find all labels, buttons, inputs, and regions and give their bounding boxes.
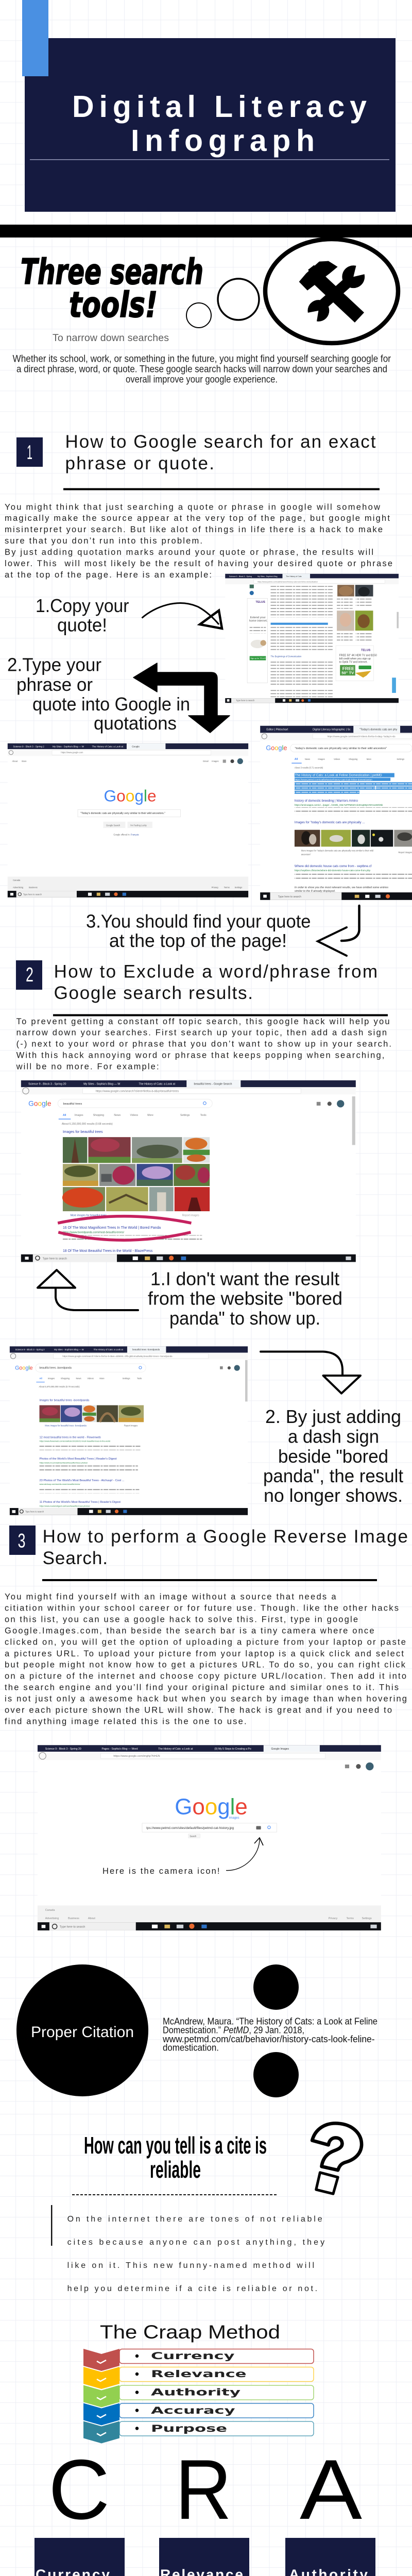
citation text: Domestication.” PetMD, 29 Jan. 2018, bbox=[163, 2025, 304, 2035]
screenshot: google images: images bbox=[229, 1816, 239, 1820]
screenshot: beautiful trees results: https://www.boredpanda.com/most-beautiful-trees/ bbox=[63, 1231, 125, 1234]
section 3 text bbox=[5, 1592, 407, 1726]
section 1 text bbox=[5, 502, 392, 580]
column: authority bbox=[285, 2442, 375, 2576]
section 2 text: will be no more. For example: bbox=[16, 1062, 159, 1072]
caption: bored panda result: from the website "bored bbox=[148, 1288, 342, 1309]
screenshot: google results: In order to show you the most relevant results, we have omitted some entries bbox=[295, 886, 388, 889]
screenshot: petmd article: The Beginnings of Domestication bbox=[271, 655, 301, 658]
screenshot: google images: Search bbox=[190, 1835, 196, 1837]
screenshot: google results: https://aminoapps.com/c/.../page/.../VeWk_G8c7uPPMDZC1k3mqE8pVWVvwWrkNk bbox=[295, 804, 383, 806]
citation text: domestication. bbox=[163, 2043, 219, 2053]
row: purpose: Purpose bbox=[151, 2423, 227, 2434]
screenshot: google results bbox=[260, 726, 412, 900]
screenshot: petmd article: Science 9 - Block 3 - Spring bbox=[229, 575, 252, 578]
title: Infograph bbox=[131, 124, 315, 158]
screenshot: results without bored panda: Images bbox=[48, 1377, 55, 1380]
screenshot: google images: Privacy bbox=[329, 1917, 338, 1920]
screenshot: petmd article bbox=[225, 574, 399, 703]
screenshot: beautiful trees results: Science 9 - Block 3 - Spring 20 bbox=[28, 1083, 66, 1086]
screenshot: google home bbox=[8, 743, 248, 897]
screenshot: results without bored panda: News bbox=[76, 1377, 81, 1380]
arrow: to the result bbox=[318, 906, 359, 956]
screenshot: google results: Images for "today's domestic cats are physically ... bbox=[295, 821, 365, 824]
row: relevance bbox=[83, 2367, 314, 2389]
screenshot: google images: Science 9 - Block 3 - Spring 20 bbox=[45, 1748, 81, 1751]
screenshot: petmd article: My Sites - Sophia's Blog bbox=[258, 575, 278, 578]
screenshot: beautiful trees results: Tools bbox=[200, 1114, 207, 1117]
section 1 heading: 1 bbox=[27, 442, 32, 464]
screenshot: results without bored panda: Shopping bbox=[61, 1377, 70, 1380]
screenshot: results without bored panda bbox=[10, 1346, 248, 1515]
section 3 text: on a picture of the internet and choose copy picture URL/location. Then add it into bbox=[5, 1672, 406, 1681]
screenshot: petmd article: https://www.petmd.com/cat/behavior/history-cats-look-feline-domestication bbox=[258, 581, 318, 583]
screenshot: google images: Pages - Sophia's Blog — Word bbox=[101, 1748, 138, 1751]
section 1 text: lower. This will most likely be the result of having your desired quote or phrase bbox=[5, 559, 392, 568]
screenshot: google images: Canada bbox=[45, 1909, 55, 1912]
screenshot: google images bbox=[38, 1745, 381, 1930]
screenshot: results without bored panda: Photos of the World's Most Beautiful Trees | Reader's Digest bbox=[40, 1458, 117, 1461]
screenshot: google results: More bbox=[367, 758, 372, 760]
screenshot: results without bored panda: Videos bbox=[87, 1377, 94, 1380]
row: purpose bbox=[83, 2421, 314, 2443]
text: reliability intro bbox=[51, 2205, 324, 2293]
screenshot: google home: Business bbox=[29, 886, 38, 889]
step: copy your quote bbox=[36, 595, 129, 636]
screenshot: petmd article: TELUS bbox=[361, 649, 371, 652]
caption: dash sign: 2. By just adding bbox=[265, 1406, 401, 1427]
section 3 heading bbox=[9, 1526, 408, 1581]
screenshot: beautiful trees results: All bbox=[63, 1114, 66, 1117]
screenshot: google home: Science 9 - Block 3 - Spring 2 bbox=[13, 745, 44, 748]
screenshot: google images: Google Images bbox=[271, 1748, 289, 1751]
screenshot: google images: The History of Cats: a Look at bbox=[158, 1748, 193, 1751]
screenshot: google home: Google bbox=[104, 787, 157, 805]
screenshot: results without bored panda: 12 most beautiful trees in the world - Flowerweb bbox=[40, 1436, 101, 1439]
section 1 text: By just adding quotation marks around your quote or phrase, the results will bbox=[5, 548, 373, 557]
screenshot: google results: The History of Cats: a Look at Feline Domestication | petMD bbox=[295, 774, 382, 777]
screenshot: google results: About 3 results (0.71 seconds) bbox=[295, 766, 323, 769]
caption: camera icon: Here is the camera icon! bbox=[102, 1867, 219, 1876]
arrow: thick two way bbox=[133, 663, 230, 733]
text: reliability intro: cites because anyone can post anything, they bbox=[67, 2238, 324, 2247]
screenshot: petmd article: Type here to search bbox=[236, 699, 254, 702]
screenshot: google images: About bbox=[88, 1917, 95, 1920]
text: reliability intro: help you determine if a cite is reliable or not. bbox=[67, 2284, 317, 2293]
column: authority: A bbox=[300, 2442, 362, 2537]
screenshot: google results: history of domestic breeding | Warriors Amino bbox=[295, 799, 358, 803]
screenshot: beautiful trees results: Type here to search bbox=[43, 1257, 67, 1260]
screenshot: results without bored panda: More images for beautiful trees -boredpanda bbox=[45, 1424, 87, 1427]
arrow: curved to article bbox=[142, 603, 222, 629]
screenshot: google images: Google bbox=[175, 1794, 248, 1819]
intro text: overall improve your google experience. bbox=[126, 374, 278, 385]
column: currency bbox=[11, 2442, 146, 2576]
step: find your quote: 3.You should find your quote bbox=[86, 911, 311, 931]
section 2 text: (-) next to your word or phrase that you don’t want to show up in your search. bbox=[16, 1040, 391, 1049]
section 3 text: the search engine and you’ll find your original picture and similar ones to it. This bbox=[5, 1683, 399, 1692]
screenshot: results without bored panda: https://www.flowerweb.com/en/article/191190/12-most-beautiful-trees-in-the-world bbox=[40, 1440, 110, 1442]
screenshot: beautiful trees results bbox=[21, 1080, 356, 1262]
screenshot: google results: Type here to search bbox=[278, 895, 301, 899]
screenshot: google home: Gmail bbox=[203, 760, 209, 762]
screenshot: petmd article: FREE bbox=[342, 666, 354, 671]
arrow: down to caption bbox=[261, 1352, 360, 1394]
step: type into google bbox=[7, 654, 190, 734]
screenshot: results without bored panda: Science 9 - Block 3 - Spring 2 bbox=[15, 1348, 45, 1351]
screenshot: google home: Settings bbox=[235, 886, 242, 889]
screenshot: google results: Images bbox=[318, 758, 325, 760]
section 3 text: on this list, you can use a google hack to solve this. First, type in google bbox=[5, 1615, 358, 1624]
screenshot: google home: I'm Feeling Lucky bbox=[130, 824, 147, 827]
section 3 text: citiation within your school career or for future use. Though. like the other hacks bbox=[5, 1603, 399, 1613]
screenshot: beautiful trees results: https://www.google.com/search?client=firefox-b-d&q=beautiful+trees bbox=[96, 1090, 179, 1093]
screenshot: google results: Where did domestic house cats come from - xeptbne.cf bbox=[295, 865, 372, 868]
heading: the craap method: The Craap Method bbox=[100, 2321, 280, 2343]
row: accuracy: Accuracy bbox=[151, 2405, 236, 2416]
screenshot: google results: "Today's domestic cats are phy bbox=[359, 728, 398, 731]
screenshot: google home: Privacy bbox=[212, 886, 219, 889]
section 2 text: narrow down your searches. First search up your topic, then add a dash sign bbox=[16, 1028, 387, 1038]
screenshot: results without bored panda: https://www.rd.com/advice/travel/beautiful-trees-photos/ bbox=[40, 1462, 88, 1464]
section 3 text: over each picture shown the URL will show. The hack is great and if you need to bbox=[5, 1705, 392, 1715]
screenshot: results without bored panda: 11 Photos of the World's Most Beautiful Trees | Reader's Digest bbox=[40, 1501, 121, 1504]
panel: title banner bbox=[22, 0, 396, 212]
screenshot: google images: (9) My 5 Steps to Creating a Po bbox=[214, 1748, 251, 1751]
screenshot: google images: Terms bbox=[346, 1917, 354, 1920]
text: reliability intro: like on it. This new funny-named method will bbox=[67, 2261, 314, 2270]
caption: dash sign bbox=[263, 1406, 403, 1506]
screenshot: beautiful trees results: Report images bbox=[182, 1214, 199, 1217]
screenshot: beautiful trees results: More bbox=[147, 1114, 153, 1117]
section 1 text: You might think that just searching a quote or phrase in google will somehow bbox=[5, 502, 380, 512]
column: relevance bbox=[151, 2442, 263, 2576]
screenshot: google images: tps://www.petmd.com/sites/default/files/petmd-cat-history.jpg bbox=[146, 1826, 234, 1830]
screenshot: petmd article: The History of Cats bbox=[286, 575, 302, 578]
screenshot: beautiful trees results: beautiful trees - Google Search bbox=[194, 1083, 232, 1086]
list: craap chevrons bbox=[83, 2349, 314, 2443]
arrow: to camera icon bbox=[226, 1838, 263, 1871]
screenshot: beautiful trees results: More images for beautiful trees bbox=[71, 1214, 107, 1217]
screenshot: results without bored panda: Settings bbox=[123, 1377, 130, 1380]
screenshot: results without bored panda: More bbox=[99, 1377, 105, 1380]
screenshot: google results: Settings bbox=[397, 758, 404, 760]
screenshot: results without bored panda: Report images bbox=[124, 1424, 138, 1427]
screenshot: google images: Settings bbox=[362, 1917, 372, 1920]
screenshot: results without bored panda: Tools bbox=[137, 1377, 142, 1380]
screenshot: petmd article: to Optik TV and internet. bbox=[339, 661, 368, 664]
icon: thought bubbles with tools bbox=[186, 239, 398, 343]
heading: how can you tell: How can you tell is a cite is bbox=[84, 2132, 267, 2159]
screenshot: results without bored panda: https://www.google.com/search?client=firefox-b-d&ei=4d59X6..Ofb-g5DoKudtw8q-beautiful+trees+-boredpanda bbox=[62, 1355, 173, 1358]
screenshot: google results: Report images bbox=[398, 851, 412, 854]
screenshot: google home: Store bbox=[22, 760, 27, 762]
title: Digital Literacy bbox=[72, 90, 367, 124]
screenshot: google results: Videos bbox=[334, 758, 340, 760]
screenshot: google results: ancestors" bbox=[301, 853, 311, 856]
screenshot: petmd article: TELUS bbox=[255, 601, 265, 604]
screenshot: google results: More images for "today's domestic cats are physically very similar to their wild bbox=[301, 850, 373, 852]
screenshot: google home: The History of Cats: a Look at bbox=[92, 745, 124, 748]
section 1 heading bbox=[16, 432, 380, 490]
section 3 text: but people might not know how to get a pictures URL. To do so, you can right click bbox=[5, 1660, 406, 1670]
circle with label bbox=[16, 1964, 148, 2096]
section 2 text: With this hack annoying word or phrase that keeps popping when searching, bbox=[16, 1051, 384, 1060]
screenshot: beautiful trees results: Google bbox=[28, 1099, 52, 1107]
icon: hammer and wrench bbox=[299, 261, 368, 325]
section 1 text: misinterpret your search. But like alot of things in life there is a hack to make bbox=[5, 525, 383, 534]
screenshot: google results: https://xeptbne.cf/stories/where-did-domestic-house-cats-come-from.php bbox=[295, 869, 370, 872]
screenshot: results without bored panda: beautiful trees -boredpanda bbox=[132, 1348, 160, 1351]
heading: three search tools bbox=[21, 252, 203, 326]
screenshot: results without bored panda: All bbox=[40, 1377, 42, 1380]
screenshot: google images: Advertising bbox=[45, 1917, 59, 1920]
icon: question mark bbox=[312, 2123, 362, 2194]
screenshot: petmd article: Sign up for TELUS bbox=[250, 657, 266, 659]
screenshot: google home: Google bbox=[132, 745, 140, 748]
screenshot: beautiful trees results: Shopping bbox=[93, 1114, 104, 1117]
screenshot: beautiful trees results: News bbox=[114, 1114, 121, 1117]
screenshot: beautiful trees results: The History of Cats: a Look at bbox=[139, 1083, 176, 1086]
screenshot: results without bored panda: Type here to search bbox=[25, 1511, 44, 1513]
screenshot: google home: Images bbox=[212, 760, 219, 762]
screenshot: beautiful trees results: Settings bbox=[180, 1114, 190, 1117]
screenshot: beautiful trees results: My Sites - Sophia's Blog — W bbox=[83, 1083, 121, 1086]
section 3 text: a pictures URL. To upload your picture from your laptop is a quick click and select bbox=[5, 1649, 404, 1658]
screenshot: google results: Google bbox=[266, 744, 287, 752]
column: currency: C bbox=[48, 2442, 110, 2537]
screenshot: beautiful trees results: About 6,150,000,000 results (0.68 seconds) bbox=[62, 1123, 113, 1126]
screenshot: google results: Editor | Piktochart bbox=[266, 728, 288, 731]
heading: how can you tell bbox=[84, 2132, 267, 2183]
screenshot: google images: Type here to search bbox=[60, 1925, 85, 1928]
heading: three search tools: tools! bbox=[69, 285, 158, 326]
section 3 heading: How to perform a Google Reverse Image bbox=[43, 1527, 408, 1547]
section 2 heading: Google search results. bbox=[54, 983, 253, 1003]
screenshot: google results: similar to the 8 already displayed. bbox=[295, 890, 335, 893]
intro text bbox=[12, 353, 391, 385]
panel: proper citation bbox=[16, 1964, 377, 2097]
screenshot: beautiful trees results: 16 Of The Most Magnificent Trees In The World | Bored Panda bbox=[63, 1226, 161, 1230]
screenshot: google home: My Sites - Sophia's Blog — W bbox=[53, 745, 84, 748]
row: currency: Currency bbox=[151, 2350, 235, 2362]
section 2 heading: How to Exclude a word/phrase from bbox=[54, 961, 377, 982]
caption: bored panda result bbox=[148, 1268, 342, 1329]
subtitle: To narrow down searches bbox=[53, 332, 169, 344]
caption: dash sign: a dash sign bbox=[288, 1426, 379, 1447]
screenshot: google home: "Today's domestic cats are physically very similar to their wild ancestors." bbox=[80, 812, 165, 815]
screenshot: petmd article: FREE 50" 4K HDR TV and $150 bbox=[339, 654, 377, 657]
screenshot: google results: All bbox=[295, 758, 298, 761]
step: copy your quote: quote! bbox=[57, 614, 107, 636]
step: find your quote bbox=[86, 911, 311, 951]
citation text: www.petmd.com/cat/behavior/history-cats-look-feline- bbox=[162, 2034, 375, 2044]
caption: dash sign: panda", the result bbox=[263, 1465, 403, 1486]
section 1 heading: How to Google search for an exact bbox=[65, 432, 376, 452]
screenshot: google home: Canada bbox=[13, 879, 21, 882]
screenshot: petmd article: home internet. bbox=[249, 620, 268, 623]
screenshot: google home: Advertising bbox=[13, 886, 23, 889]
screenshot: results without bored panda: The History of Cats: a Look at bbox=[94, 1348, 124, 1351]
screenshot: google images: https://www.google.com/imghp?hl=EN bbox=[113, 1755, 160, 1758]
title bbox=[72, 90, 367, 158]
screenshot: google results: News bbox=[305, 758, 310, 760]
section 3 text: clicked on, you will get the option of uploading a picture from your laptop or paste bbox=[5, 1637, 406, 1647]
screenshot: google results: https://www.petmd.com/cat/behavior/history-cats-look-feline-domestication bbox=[295, 778, 372, 781]
section 3 text: Google.Images.com, than beside the search bar is a tiny camera where once bbox=[5, 1626, 374, 1635]
section 2 heading: 2 bbox=[26, 964, 33, 986]
screenshot: google home: About bbox=[12, 760, 18, 762]
citation text: McAndrew, Maura. “The History of Cats: a Look at Feline bbox=[163, 2016, 377, 2027]
caption: dash sign: no longer shows. bbox=[264, 1485, 403, 1506]
step: type into google: quote into Google in bbox=[32, 693, 190, 715]
screenshot: petmd article: Extend your bbox=[250, 616, 266, 619]
screenshot: google home: Google offered in: Français bbox=[113, 833, 139, 836]
screenshot: google results: Digital Literacy Infographic | Sc bbox=[313, 728, 351, 731]
heading: three search tools: Three search bbox=[21, 252, 203, 293]
section 3 text: find anything image related this is the one to use. bbox=[5, 1717, 247, 1726]
section 2 text bbox=[16, 1017, 391, 1072]
screenshot: results without bored panda: beautiful trees -boredpanda bbox=[40, 1367, 72, 1370]
screenshot: results without bored panda: Google bbox=[15, 1365, 33, 1371]
step: copy your quote: 1.Copy your bbox=[36, 595, 129, 616]
section 1 text: magically make the source appear at the very top of the page, but google might bbox=[5, 514, 390, 523]
screenshot: google home: https://www.google.com bbox=[61, 751, 83, 754]
blue accent tab bbox=[22, 0, 48, 76]
section 2 heading bbox=[16, 960, 388, 1016]
screenshot: petmd article: bill credit when you sign up bbox=[339, 657, 371, 660]
step: find your quote: at the top of the page! bbox=[109, 930, 287, 951]
text: reliability intro: On the internet there are tones of not reliable bbox=[67, 2215, 322, 2224]
screenshot: beautiful trees results: beautiful trees bbox=[63, 1103, 82, 1106]
screenshot: google home: Type here to search bbox=[23, 893, 42, 896]
screenshot: beautiful trees results: Images bbox=[75, 1114, 83, 1117]
section 3 heading: 3 bbox=[18, 1530, 26, 1552]
screenshot: petmd article: 50" TV bbox=[341, 671, 354, 675]
screenshot: results without bored panda: About 5,670,000,000 results (0.78 seconds) bbox=[39, 1385, 80, 1388]
screenshot: beautiful trees results: Videos bbox=[130, 1114, 138, 1117]
row: accuracy bbox=[83, 2403, 314, 2426]
screenshot: google results: "today's domestic cats are physically very similar to their wild ancestors" bbox=[295, 747, 387, 750]
step: type into google: 2.Type your bbox=[7, 654, 101, 675]
row: currency bbox=[83, 2349, 314, 2371]
arrow: up from caption to results bbox=[38, 1270, 138, 1310]
row: authority: Authority bbox=[151, 2386, 241, 2398]
screenshot: google results: https://www.google.com/search?client=firefox-b-d&q="today's+do bbox=[328, 735, 396, 738]
circle with label: Proper Citation bbox=[31, 2024, 134, 2041]
step: type into google: quotations bbox=[94, 713, 177, 734]
section 1 text: sure that you don’t run into this problem. bbox=[5, 536, 202, 546]
column: relevance: R bbox=[175, 2442, 232, 2537]
step: type into google: phrase or bbox=[16, 674, 93, 695]
section 1 text: at the top of the page. Here is an example: bbox=[5, 570, 212, 580]
screenshot: google home: Google Search bbox=[106, 824, 120, 827]
screenshot: google results: Shopping bbox=[349, 758, 357, 760]
section 1 heading: phrase or quote. bbox=[65, 453, 214, 473]
section 3 text: You might find yourself with an image without a source that needs a bbox=[5, 1592, 336, 1602]
screenshot: google home: Terms bbox=[224, 886, 230, 889]
screenshot: results without bored panda: https://www.readersdigest.ca/travel/beautiful-trees-photos/ bbox=[40, 1505, 91, 1507]
screenshot: results without bored panda: www.atchuup.com/worlds-most-beautiful-trees/ bbox=[40, 1483, 81, 1485]
caption: dash sign: beside "bored bbox=[278, 1446, 388, 1467]
section 3 text: is not just only a awesome hack but when you search by image than when hovering bbox=[5, 1694, 407, 1704]
screenshot: google images: Business bbox=[68, 1917, 79, 1920]
section 3 heading: Search. bbox=[43, 1548, 108, 1568]
row: relevance: Relevance bbox=[151, 2368, 247, 2380]
section 2 text: To prevent getting a constant off topic search, this google hack will help you bbox=[16, 1017, 390, 1026]
screenshot: beautiful trees results: 18 Of The Most Beautiful Trees in the World - BlazePress bbox=[63, 1249, 153, 1253]
heading: how can you tell: reliable bbox=[150, 2156, 201, 2183]
citation text bbox=[162, 2016, 377, 2053]
screenshot: results without bored panda: 23 Photos of The World's Most Beautiful Trees - Atchuup! - Cool ... bbox=[40, 1479, 125, 1482]
caption: bored panda result: panda" to show up. bbox=[169, 1308, 320, 1329]
screenshot: beautiful trees results: Images for beautiful trees bbox=[63, 1130, 103, 1134]
caption: bored panda result: 1.I don't want the result bbox=[150, 1268, 339, 1289]
screenshot: results without bored panda: Images for beautiful trees -boredpanda bbox=[40, 1399, 90, 1402]
screenshot: results without bored panda: My Sites - Sophia's Blog — W bbox=[54, 1348, 84, 1351]
row: authority bbox=[83, 2385, 314, 2407]
